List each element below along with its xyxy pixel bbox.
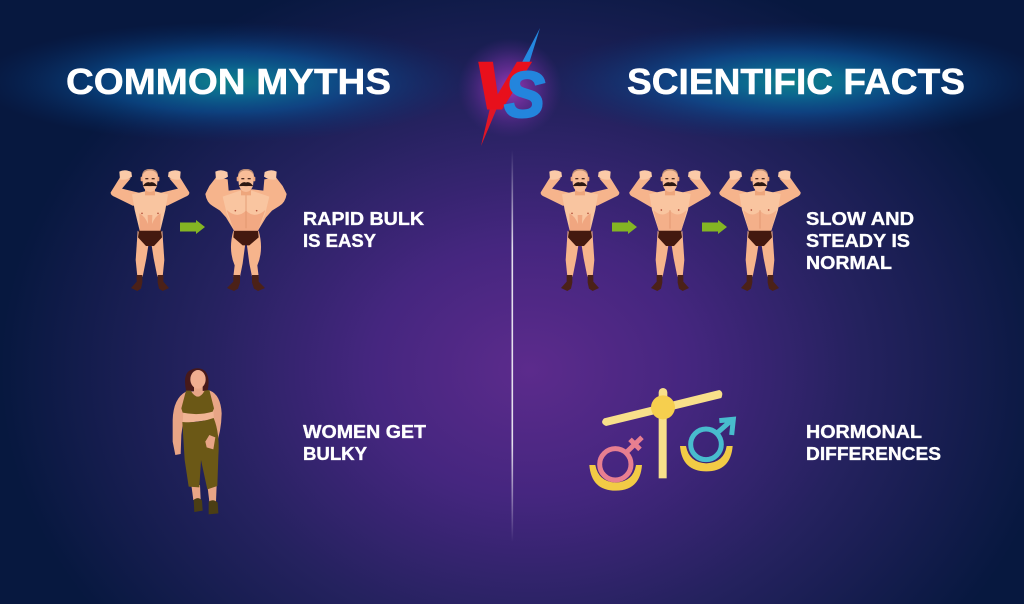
myth 2 label: WOMEN GET (303, 422, 426, 442)
figure: medium man (629, 169, 711, 291)
scale stand (602, 388, 722, 478)
center divider (512, 150, 513, 542)
myth 2 illustration: woman (173, 368, 222, 514)
fact 2 label (806, 422, 941, 464)
fact 1 label (806, 209, 914, 273)
figure: toned man (719, 169, 801, 291)
heading glow left (0, 22, 478, 142)
heading glow right (540, 22, 1024, 142)
fact 1 label: NORMAL (806, 253, 892, 273)
figure: muscular man (205, 169, 287, 291)
leggings (182, 418, 219, 489)
crop top (181, 390, 214, 414)
myth 1 label (303, 209, 424, 251)
lightning lower (481, 108, 497, 146)
letter V: V (474, 49, 529, 122)
myth 1 label: RAPID BULK (303, 209, 424, 229)
body skin (173, 385, 222, 502)
midriff (183, 410, 214, 423)
hand over hip (205, 435, 215, 449)
lightning upper (518, 28, 540, 70)
fact 1 illustration: slow progress (541, 169, 801, 291)
male symbol with pan (680, 419, 733, 471)
myth 2 label (303, 422, 426, 464)
fact 1 label: SLOW AND (806, 209, 914, 229)
myth 1 illustration: rapid bulk (111, 169, 287, 291)
hair (185, 368, 209, 392)
fact 2 label: HORMONAL (806, 422, 922, 442)
fact 2 illustration: hormone scale (589, 388, 733, 491)
shoes (194, 498, 203, 512)
myth 2 label: BULKY (303, 444, 367, 464)
figure: slim man (541, 169, 619, 291)
myth 1 label: IS EASY (303, 231, 376, 251)
arrow (180, 220, 205, 234)
fact 2 label: DIFFERENCES (806, 444, 941, 464)
title: common myths: COMMON MYTHS (66, 61, 391, 102)
VS badge (458, 28, 562, 146)
figure: slim man (111, 169, 189, 291)
fact 1 label: STEADY IS (806, 231, 910, 251)
arrow (612, 220, 637, 234)
title: scientific facts: SCIENTIFIC FACTS (627, 61, 965, 102)
arrow (702, 220, 727, 234)
female symbol with pan (589, 437, 642, 491)
letter S: S (504, 58, 545, 131)
